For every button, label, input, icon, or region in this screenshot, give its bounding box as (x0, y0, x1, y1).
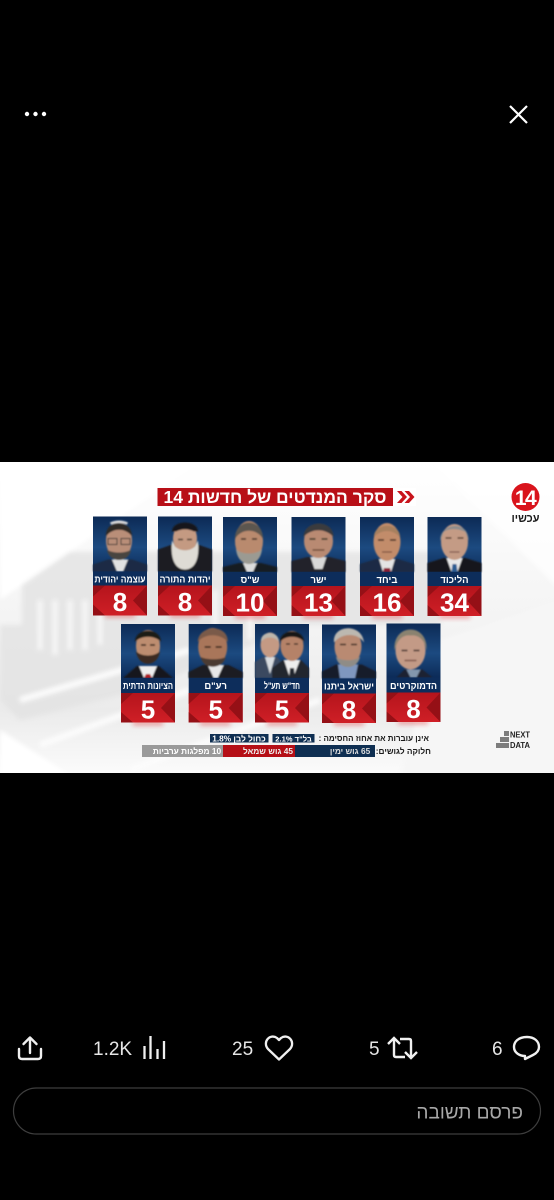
card: Raam 5 (189, 624, 243, 724)
logo: next data (496, 731, 530, 748)
card: Yisrael Beytenu 8: 8 (342, 695, 356, 725)
bloc split bar: חלוקה לגושים: (376, 746, 431, 756)
card: Democrats 8: הדמוקרטים (390, 681, 437, 692)
card: Yisrael Beytenu 8 (322, 624, 376, 725)
logo: next data: DATA (510, 740, 530, 750)
logo: channel 14: עכשיו (512, 513, 540, 525)
icon: close (510, 106, 527, 123)
stat: reposts (369, 1038, 417, 1060)
card: Bennett 16: 16 (373, 588, 401, 618)
card: Religious Zionism 5 (121, 624, 175, 724)
card: Shas 10: ש"ס (241, 575, 260, 586)
logo: channel 14 (512, 483, 540, 525)
reply input: פרסם תשובה (416, 1102, 523, 1124)
stat: views: 1.2K (93, 1039, 132, 1060)
card: Hadash-Taal 5: 5 (275, 694, 289, 724)
card: Shas 10: 10 (236, 588, 264, 618)
logo: next data: NEXT (510, 730, 531, 740)
card: Likud 34: 34 (440, 588, 469, 618)
card: Religious Zionism 5: הציונות הדתית (123, 681, 173, 692)
card: Democrats 8: 8 (406, 694, 421, 724)
threshold note: בל"ד 2.1% (275, 734, 312, 744)
card: Shas 10 (223, 517, 277, 618)
card: UTJ 8: 8 (178, 587, 192, 617)
card: Raam 5: רע"ם (204, 681, 227, 692)
stat: replies (492, 1037, 539, 1060)
card: Yashar 13: 13 (304, 588, 333, 618)
threshold note: כחול לבן 1.8% (212, 734, 266, 744)
red glows under cards (105, 614, 470, 725)
reply input (14, 1088, 540, 1134)
background: parliament building and road (0, 552, 554, 758)
card: Democrats 8 (386, 624, 440, 724)
bloc split bar (142, 745, 431, 757)
card: Likud 34 (428, 517, 482, 618)
threshold note (210, 734, 429, 743)
card: Otzma 8: עוצמה יהודית (94, 574, 146, 586)
icon: more options dots (25, 112, 46, 116)
card: Bennett 16: ביחד (377, 575, 397, 586)
card: Bennett 16 (360, 517, 414, 618)
stat: likes: 25 (232, 1039, 253, 1060)
bloc split bar: 65 גוש ימין (330, 746, 371, 756)
card: Likud 34: הליכוד (440, 575, 469, 586)
stat: views (93, 1036, 164, 1060)
threshold note: אינן עוברות את אחוז החסימה : (319, 734, 430, 743)
icon: share (19, 1038, 41, 1059)
card: UTJ 8 (158, 516, 212, 617)
card: Hadash-Taal 5: חד"ש תע"ל (264, 681, 300, 692)
title: סקר המנדטים של חדשות 14 (164, 487, 386, 507)
card: Yashar 13 (292, 517, 346, 618)
card: Otzma 8: 8 (113, 587, 127, 617)
card: Otzma 8 (93, 516, 147, 617)
card: Yashar 13: ישר (310, 575, 327, 586)
stat: likes (232, 1037, 292, 1060)
card: Raam 5: 5 (208, 694, 223, 724)
infographic panel (0, 462, 554, 775)
logo: channel 14: 14 (515, 487, 537, 510)
bloc split bar: 10 מפלגות ערביות (153, 746, 221, 756)
card: UTJ 8: יהדות התורה (160, 574, 211, 586)
card: Yisrael Beytenu 8: ישראל ביתנו (324, 682, 374, 692)
card: Hadash-Taal 5 (255, 624, 309, 724)
stat: reposts: 5 (369, 1039, 380, 1060)
card: Religious Zionism 5: 5 (141, 694, 155, 724)
bloc split bar: 45 גוש שמאל (243, 746, 293, 756)
stat: replies: 6 (492, 1039, 503, 1060)
